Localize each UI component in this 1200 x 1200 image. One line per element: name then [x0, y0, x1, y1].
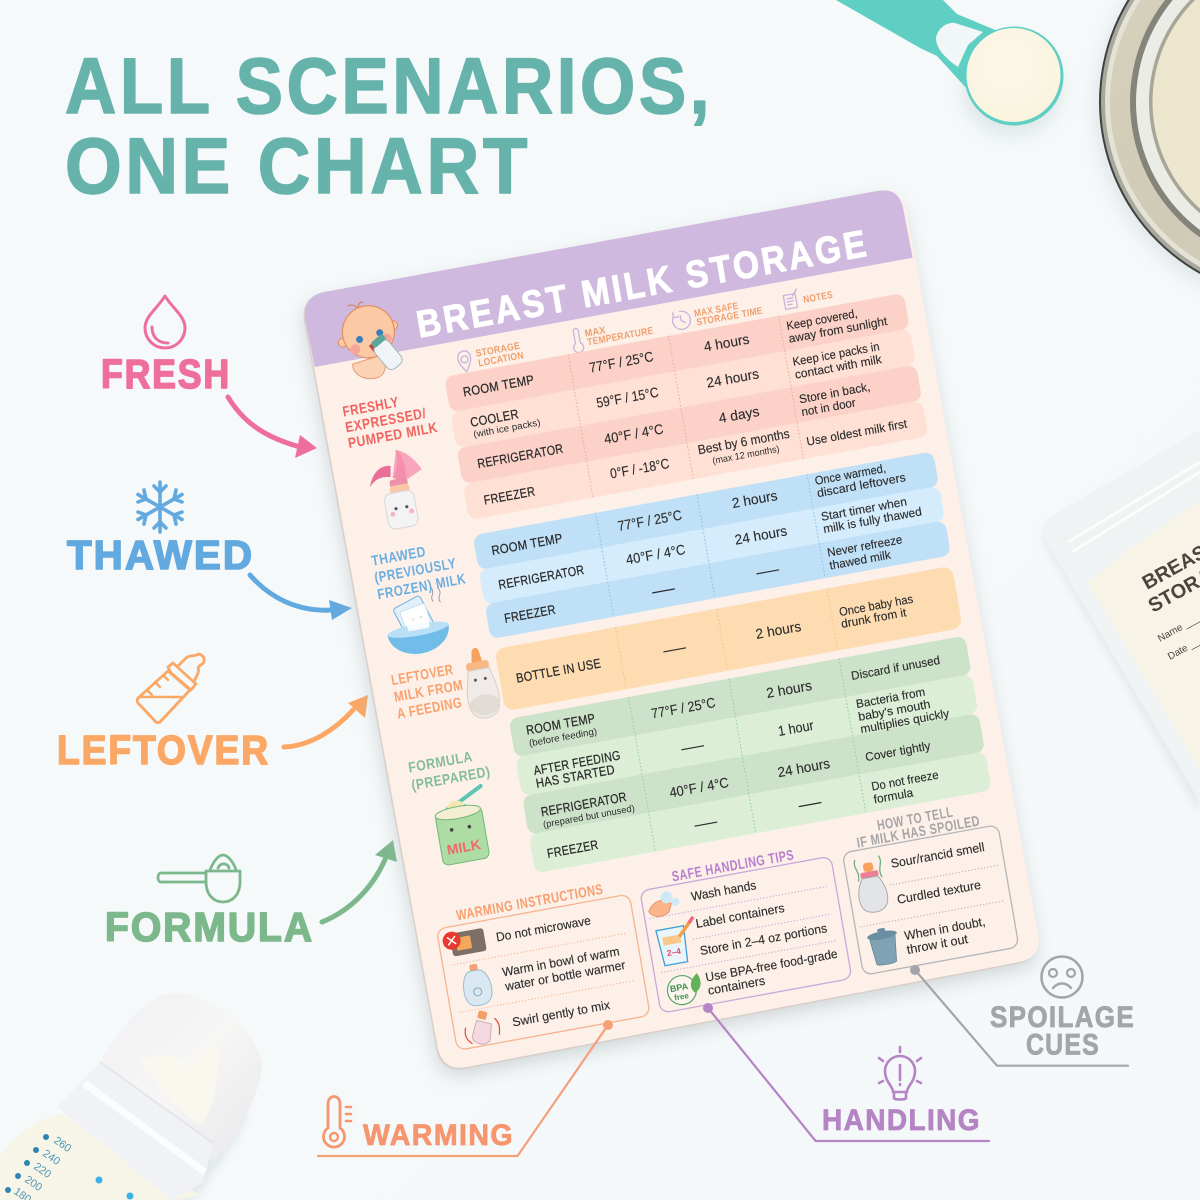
photo: formula tin: [1095, 0, 1200, 305]
icon: swirling bottle: [462, 1007, 502, 1047]
arrow: formula to chart: [322, 840, 397, 922]
table: formula: 24 hours: [776, 755, 831, 780]
callout: handling: [703, 1003, 989, 1141]
table: thawed milk: ROOM TEMP: [490, 530, 564, 558]
photo: baby bottle: 240: [40, 1148, 62, 1168]
table: formula: REFRIGERATOR: [540, 789, 628, 819]
icon: thermometer: [324, 1096, 351, 1147]
icon: microwave crossed out: [441, 926, 487, 958]
table: fresh milk: REFRIGERATOR: [476, 441, 564, 471]
category: leftover: LEFTOVER: [390, 662, 455, 689]
category: formula: [407, 746, 492, 794]
callout: spoilage cues: [910, 956, 1135, 1066]
photo: milk storage bag: [1043, 430, 1200, 815]
label: leftover: [57, 654, 270, 773]
table: fresh milk: Best by 6 months: [697, 426, 791, 457]
table: thawed milk: 24 hours: [733, 522, 788, 548]
panel: safe handling tips: Use BPA-free food-grade: [704, 947, 839, 985]
title: ALL SCENARIOS,: [65, 41, 713, 130]
label: thawed: [67, 482, 254, 578]
panel: safe handling tips: Wash hands: [690, 878, 757, 904]
label: formula: FORMULA: [105, 904, 314, 950]
chart title: BREAST MILK STORAGE: [414, 223, 872, 347]
icon: trash bin: [866, 926, 902, 967]
panel: spoilage: When in doubt,: [903, 915, 986, 943]
icon: formula can: MILK: [446, 836, 482, 858]
table: bottle in use: BOTTLE IN USE: [515, 655, 602, 686]
category: leftover: [390, 661, 467, 723]
table: fresh milk: 40°F / 4°C: [603, 420, 665, 447]
header band: [301, 187, 913, 367]
category: freshly expressed: PUMPED MILK: [347, 420, 439, 452]
table: fresh milk: (max 12 months): [712, 444, 780, 467]
title: [65, 41, 713, 210]
table: thawed milk: discard leftovers: [816, 470, 907, 500]
callout: handling: HANDLING: [822, 1104, 981, 1137]
table: thawed milk: Once warmed,: [814, 461, 887, 488]
category: formula: FORMULA: [407, 749, 474, 777]
table: bottle in use: [494, 566, 963, 711]
table: formula: baby's mouth: [857, 697, 931, 724]
category: thawed: [370, 538, 467, 603]
panel: spoilage: Sour/rancid smell: [890, 840, 986, 871]
table: formula: AFTER FEEDING: [532, 747, 622, 778]
label: fresh: [101, 296, 231, 397]
panel: warming instructions: Swirl gently to mix: [511, 998, 612, 1029]
icon: leftover bottle: [459, 645, 503, 721]
table: formula: Do not freeze: [870, 768, 940, 794]
table: thawed milk: FREEZER: [503, 602, 557, 626]
panel: safe handling tips: Store in 2–4 oz portions: [699, 921, 828, 958]
arrow: fresh to chart: [228, 397, 317, 458]
icon: formula can: [431, 786, 493, 866]
panel: warming instructions: water or bottle warmer: [503, 958, 626, 994]
table: formula: [509, 635, 992, 874]
label: formula: [105, 855, 314, 950]
table columns: headers: MAX SAFE: [693, 301, 739, 320]
callout: warming: WARMING: [363, 1119, 514, 1152]
table: fresh milk: 4 days: [717, 403, 760, 426]
table: bottle in use: 2 hours: [754, 618, 802, 642]
table: thawed milk: Never refreeze: [826, 532, 904, 560]
panel: spoilage: throw it out: [906, 932, 970, 957]
table: fresh milk: Keep covered,: [785, 306, 859, 333]
icon: breast pump: [364, 446, 431, 532]
table: fresh milk: COOLER: [469, 406, 520, 430]
table: fresh milk: away from sunlight: [788, 314, 889, 346]
table: formula: 40°F / 4°C: [668, 774, 730, 801]
table: fresh milk: not in door: [800, 395, 857, 419]
table: fresh milk: (with ice packs): [473, 417, 541, 440]
table: thawed milk: 40°F / 4°C: [625, 541, 686, 568]
table: bottle in use: drunk from it: [840, 605, 908, 631]
icon: baby drinking from bottle: [332, 296, 407, 384]
table: thawed milk: REFRIGERATOR: [497, 562, 585, 592]
table: thawed milk: thawed milk: [828, 547, 893, 573]
table: formula: Bacteria from: [855, 685, 926, 711]
table: fresh milk: contact with milk: [794, 352, 884, 382]
table columns: headers: [456, 282, 835, 374]
icon: location pin: [457, 350, 473, 373]
icon: baby bottle outline: [137, 654, 204, 723]
table: formula: 1 hour: [777, 717, 815, 739]
icon: washing hands: [646, 889, 681, 918]
table: formula: ROOM TEMP: [525, 710, 596, 738]
table: formula: Discard if unused: [850, 653, 941, 683]
label: leftover: LEFTOVER: [57, 727, 270, 773]
table: fresh milk: 77°F / 25°C: [588, 348, 655, 376]
callout: spoilage cues: SPOILAGE: [990, 1001, 1135, 1034]
table: thawed milk: [473, 451, 951, 639]
arrow: thawed to chart: [250, 575, 352, 620]
table: fresh milk: 4 hours: [702, 331, 750, 355]
callout: warming: [318, 1020, 613, 1156]
table: thawed milk: 2 hours: [731, 487, 779, 511]
icon: formula scoop outline: [158, 855, 240, 902]
panel: warming instructions: WARMING INSTRUCTIONS: [455, 882, 604, 924]
panel: spoilage: HOW TO TELL: [876, 805, 954, 834]
label: fresh: FRESH: [101, 351, 231, 397]
table: fresh milk: 24 hours: [705, 365, 760, 391]
table: fresh milk: 59°F / 15°C: [595, 384, 660, 411]
table: thawed milk: 77°F / 25°C: [616, 507, 683, 534]
panel: spoilage: [838, 797, 1019, 975]
icon: bottle warmer: [460, 962, 494, 1008]
icon: thermometer small: [570, 328, 584, 353]
table: formula: (prepared but unused): [542, 803, 636, 831]
table: thawed milk: milk is fully thawed: [822, 504, 923, 536]
table: fresh milk: Store in back,: [798, 380, 871, 406]
panel: safe handling tips: Label containers: [695, 901, 786, 931]
category: freshly expressed: FRESHLY: [341, 395, 400, 421]
table: bottle in use: Once baby has: [838, 592, 914, 619]
table: fresh milk: [444, 293, 928, 520]
category: formula: (PREPARED): [410, 764, 492, 794]
table: formula: 2 hours: [765, 677, 813, 701]
table: fresh milk: 0°F / -18°C: [609, 455, 671, 482]
icon: clock: [671, 310, 692, 331]
table: formula: FREEZER: [546, 837, 600, 861]
chart card: [298, 185, 1044, 1081]
photo: baby bottle: 200: [22, 1174, 44, 1194]
icon: milk drop: [145, 296, 185, 348]
panel: warming instructions: Do not microwave: [495, 913, 592, 945]
photo: baby bottle: 260: [51, 1135, 73, 1155]
photo: baby bottle: 220: [31, 1161, 53, 1181]
icon: BPA free badge: free: [674, 991, 690, 1003]
icon: labelled milk bag: 2–4: [666, 946, 682, 958]
table: fresh milk: FREEZER: [483, 484, 536, 508]
panel: safe handling tips: [637, 841, 852, 1013]
icon: spoiled bottle: [852, 855, 890, 915]
label: thawed: THAWED: [67, 532, 254, 578]
table: formula: formula: [872, 785, 915, 806]
table: formula: HAS STARTED: [535, 762, 616, 791]
panel: warming instructions: [434, 877, 650, 1050]
photo: measuring scoop with powder: [836, 0, 1064, 136]
table columns: headers: TEMPERATURE: [587, 326, 654, 348]
category: thawed: (PREVIOUSLY: [373, 556, 458, 587]
icon: notes: [783, 289, 799, 309]
category: leftover: A FEEDING: [396, 695, 464, 723]
icon: light bulb: [879, 1047, 921, 1100]
title: ONE CHART: [65, 121, 531, 210]
category: freshly expressed: [341, 388, 439, 452]
icon: milk bag in warm bowl: [381, 586, 453, 659]
icon: snowflake: [138, 482, 182, 532]
table: formula: multiplies quickly: [859, 706, 950, 736]
table columns: headers: LOCATION: [478, 350, 525, 369]
icon: sad face: [1042, 956, 1082, 998]
icon: BPA free badge: BPA: [669, 981, 689, 994]
table: thawed milk: Start timer when: [820, 494, 908, 524]
category: leftover: MILK FROM: [393, 678, 465, 706]
panel: spoilage: IF MILK HAS SPOILED: [856, 813, 981, 852]
table: fresh milk: ROOM TEMP: [462, 372, 535, 400]
panel: safe handling tips: containers: [707, 974, 766, 998]
table columns: headers: NOTES: [802, 290, 834, 306]
panel: safe handling tips: SAFE HANDLING TIPS: [671, 847, 795, 885]
icon: BPA free badge: [665, 972, 704, 1007]
panel: warming instructions: Warm in bowl of warm: [501, 944, 621, 979]
category: freshly expressed: EXPRESSED/: [344, 406, 428, 436]
table: formula: Cover tightly: [864, 739, 931, 764]
icon: labelled milk bag: [655, 917, 700, 966]
table columns: headers: STORAGE: [475, 341, 521, 360]
photo: baby bottle: [0, 993, 262, 1200]
table: formula: (before feeding): [528, 726, 598, 749]
table: fresh milk: Keep ice packs in: [792, 339, 881, 369]
callout: spoilage cues: CUES: [1026, 1028, 1100, 1062]
table columns: headers: STORAGE TIME: [696, 306, 764, 329]
table columns: headers: MAX: [584, 325, 607, 340]
category: thawed: THAWED: [370, 544, 427, 570]
arrow: leftover to chart: [284, 695, 368, 747]
table: fresh milk: Use oldest milk first: [805, 416, 909, 449]
panel: spoilage: Curdled texture: [896, 878, 982, 907]
category: thawed: FROZEN) MILK: [376, 571, 467, 603]
table: formula: 77°F / 25°C: [650, 694, 717, 722]
